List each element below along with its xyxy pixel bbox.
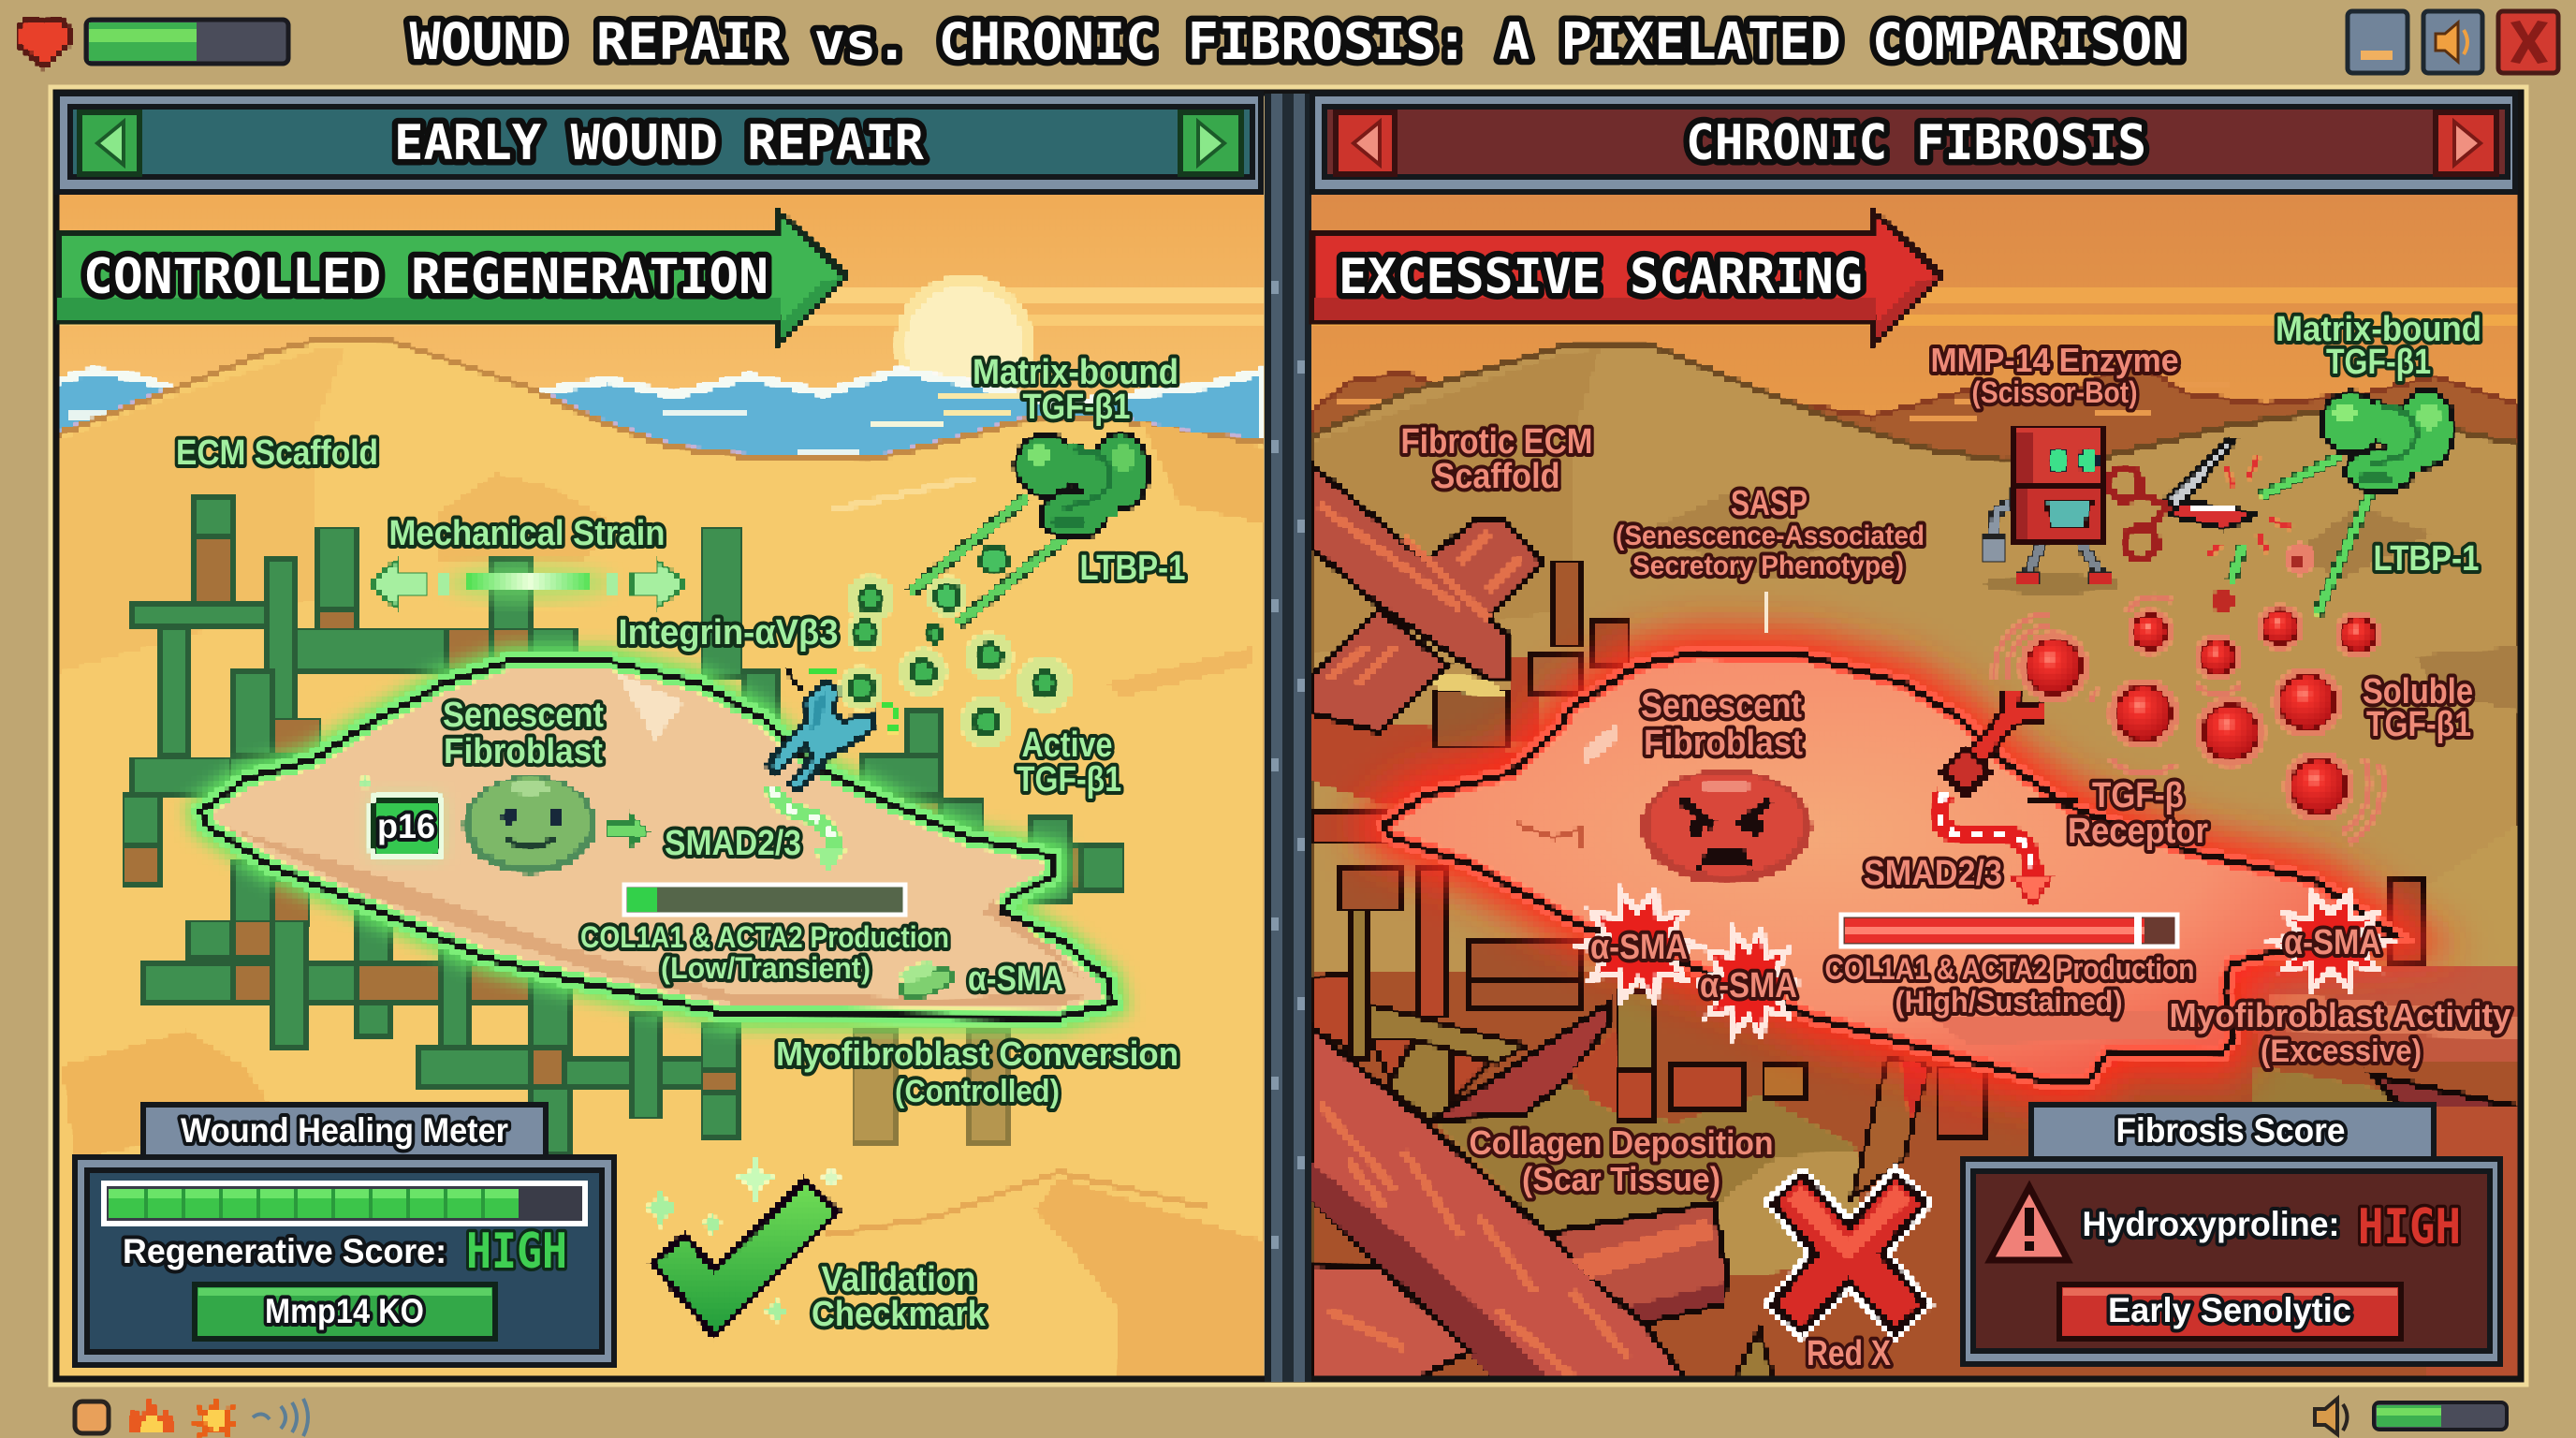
label: excessive: (Excessive)	[2261, 1034, 2422, 1069]
label: myofibroblast activity: Myofibroblast Activity	[2170, 996, 2510, 1034]
label: matrix-bound: Matrix-bound	[2276, 310, 2481, 349]
label: early senolytic: Early Senolytic	[2108, 1291, 2351, 1329]
label: ECM scaffold: ECM Scaffold	[176, 433, 378, 473]
button: Mmp14 KO	[195, 1284, 495, 1339]
label: SMAD2/3: SMAD2/3	[1864, 854, 2002, 893]
banner arrow: excessive scarring	[1314, 213, 1940, 340]
dune	[53, 340, 1265, 1386]
fibrotic ECM beams	[1310, 463, 2527, 1386]
panel: wound healing meter	[75, 1157, 614, 1365]
footer: sound and volume	[2315, 1399, 2507, 1434]
icon: matrix-bound TGF-b1	[2324, 393, 2452, 490]
top bar: close button	[2498, 11, 2558, 73]
label: receptor: Receptor	[2068, 812, 2208, 851]
soluble TGF-b1 particles	[1994, 542, 2382, 843]
label: mechanical strain: Mechanical Strain	[389, 514, 665, 553]
sky	[1310, 187, 2523, 468]
label: myofibroblast conversion: Myofibroblast Conversion	[776, 1034, 1178, 1073]
value: high: HIGH	[466, 1224, 567, 1280]
icon: sound wave	[253, 1399, 308, 1436]
label: TGF-b1: TGF-β1	[2326, 343, 2431, 382]
icon: alpha-SMA burst 2	[1698, 929, 1797, 1037]
icon: red X	[1773, 1176, 1925, 1331]
label: scissor-bot: (Scissor-Bot)	[1971, 375, 2138, 409]
LTBP-1 ladder	[910, 496, 1067, 624]
button: next	[1180, 112, 1241, 174]
title: WOUND REPAIR vs. CHRONIC FIBROSIS: A PIXELATED COMPARISON	[410, 12, 2183, 71]
label: active TGF-b1: TGF-β1	[1017, 760, 1121, 800]
bar: volume	[2374, 1402, 2507, 1430]
label: senescence-associated: (Senescence-Associated	[1616, 521, 1925, 551]
label: production: COL1A1 & ACTA2 Production	[1825, 952, 2194, 986]
top bar: sound button	[2423, 11, 2482, 73]
icon: scissor-bot robot	[1983, 427, 2121, 594]
icon: alpha-SMA fibres	[899, 961, 955, 1000]
label: p16: p16	[377, 807, 435, 845]
sky	[60, 195, 1264, 399]
meter tab: wound healing	[143, 1105, 546, 1159]
label: checkmark: Checkmark	[812, 1295, 987, 1334]
ECM scaffold	[124, 495, 1123, 1155]
label: alpha-SMA 3: α-SMA	[2284, 923, 2381, 962]
icon: flame	[127, 1397, 175, 1434]
meter text: wound healing	[123, 1111, 567, 1330]
label: TGF-b1: TGF-β1	[1022, 388, 1131, 427]
dune	[1312, 344, 2520, 1386]
icon: smiling nucleus	[462, 775, 597, 874]
score text: fibrosis	[2082, 1111, 2461, 1329]
button: previous	[80, 112, 139, 174]
active TGF-b1 particles	[839, 575, 1073, 748]
label: fibroblast: Fibroblast	[444, 732, 603, 771]
label: regenerative score: Regenerative Score:	[123, 1232, 446, 1270]
production bar: low	[624, 885, 905, 915]
label: hydroxyproline: Hydroxyproline:	[2082, 1205, 2340, 1243]
upper left planks	[1551, 562, 1579, 646]
panel: fibrosis score	[1963, 1159, 2500, 1364]
icon: sun	[893, 275, 1033, 389]
label: integrin: Integrin-αVβ3	[618, 613, 839, 653]
label: alpha-SMA 2: α-SMA	[1700, 966, 1797, 1005]
sea	[53, 371, 1265, 468]
top bar: heart icon	[18, 19, 70, 67]
fibroblast cell glow	[1385, 653, 2396, 1083]
label: alpha-SMA 1: α-SMA	[1590, 928, 1688, 967]
label: meter title: Wound Healing Meter	[181, 1111, 508, 1150]
label: validation: Validation	[822, 1260, 975, 1299]
label: LTBP-1: LTBP-1	[1080, 549, 1185, 588]
label: LTBP-1: LTBP-1	[2374, 539, 2479, 579]
central divider	[1265, 94, 1311, 1382]
label: matrix-bound: Matrix-bound	[973, 353, 1178, 392]
icon: angry nucleus	[1640, 769, 1812, 885]
label: collagen deposition: Collagen Deposition	[1470, 1123, 1773, 1162]
mechanical strain glow	[370, 560, 685, 609]
label: scar tissue: (Scar Tissue)	[1522, 1160, 1720, 1198]
label: controlled: (Controlled)	[895, 1074, 1060, 1109]
label: senescent: Senescent	[443, 696, 604, 735]
label: high sustained: (High/Sustained)	[1895, 985, 2123, 1019]
labels: early wound repair	[176, 353, 1185, 1334]
icon: matrix-bound TGF-b1	[1018, 435, 1146, 536]
LTBP-1 rods	[2231, 456, 2370, 615]
label: TGF-beta: TGF-β	[2092, 776, 2184, 815]
top bar: health bar	[86, 20, 288, 64]
icon: alpha-SMA burst 1	[1580, 890, 1696, 1001]
button: early senolytic	[2059, 1284, 2401, 1339]
progress bar: regenerative score	[104, 1183, 585, 1224]
label: Mmp14 KO: Mmp14 KO	[265, 1292, 424, 1330]
arrow: SMAD signal	[772, 786, 848, 873]
mountains	[1312, 360, 2518, 524]
label: low transient: (Low/Transient)	[661, 951, 871, 985]
footer: status icons	[75, 1397, 308, 1436]
icon: speaker	[2315, 1399, 2348, 1434]
icon: spark	[193, 1398, 238, 1436]
label: fibroblast: Fibroblast	[1644, 724, 1803, 763]
cell: senescent fibroblast	[201, 661, 1113, 1018]
label: soluble: Soluble	[2363, 672, 2473, 712]
production bar: high	[1841, 915, 2177, 946]
label: SASP: SASP	[1731, 484, 1808, 523]
icon: TGF-beta receptor	[1942, 691, 2080, 800]
label: fibrosis score: Fibrosis Score	[2115, 1111, 2346, 1150]
label: alpha-SMA: α-SMA	[968, 960, 1063, 999]
label: production: COL1A1 & ACTA2 Production	[580, 920, 949, 954]
arrow: to SMAD	[607, 814, 649, 844]
label: scaffold: Scaffold	[1434, 457, 1559, 496]
icon: barrel	[75, 1401, 109, 1433]
labels: chronic fibrosis	[1400, 310, 2510, 1373]
icon: validation checkmark	[644, 1156, 841, 1336]
label: soluble TGF-b1: TGF-β1	[2366, 705, 2471, 744]
label: red X: Red X	[1807, 1334, 1892, 1373]
meter tab: fibrosis score	[2031, 1105, 2434, 1159]
label: secretory phenotype: Secretory Phenotype)	[1632, 550, 1904, 581]
banner arrow: controlled regeneration	[59, 213, 845, 340]
banner text: controlled regeneration: CONTROLLED REGENERATION	[83, 249, 768, 305]
icon: warning triangle	[1990, 1187, 2068, 1260]
arrow: SMAD signal	[1939, 792, 2052, 906]
panel: chronic fibrosis scene	[1310, 187, 2527, 1386]
banner text: excessive scarring: EXCESSIVE SCARRING	[1339, 249, 1863, 305]
panel header: chronic fibrosis	[1312, 94, 2515, 192]
panel header: early wound repair	[57, 94, 1261, 192]
button: next	[2436, 112, 2496, 174]
icon: scissors	[2109, 438, 2293, 559]
label: MMP-14: MMP-14 Enzyme	[1930, 341, 2179, 379]
value: high: HIGH	[2358, 1199, 2461, 1255]
label: SMAD2/3: SMAD2/3	[665, 824, 801, 863]
SASP tick	[1764, 592, 1768, 633]
top bar: minimize button	[2348, 11, 2408, 73]
icon: alpha-SMA burst 3	[2273, 895, 2389, 989]
label: fibrotic ECM: Fibrotic ECM	[1400, 422, 1593, 462]
right side planks	[2232, 964, 2520, 1063]
label: senescent: Senescent	[1641, 686, 1802, 726]
button: previous	[1336, 112, 1395, 174]
label: active: Active	[1022, 726, 1112, 765]
panel: early wound repair scene	[53, 187, 1267, 1386]
heading: early wound repair: EARLY WOUND REPAIR	[394, 115, 925, 171]
heading: chronic fibrosis: CHRONIC FIBROSIS	[1686, 115, 2146, 171]
icon: p16 box	[360, 772, 444, 858]
icon: integrin wrench	[768, 666, 897, 791]
